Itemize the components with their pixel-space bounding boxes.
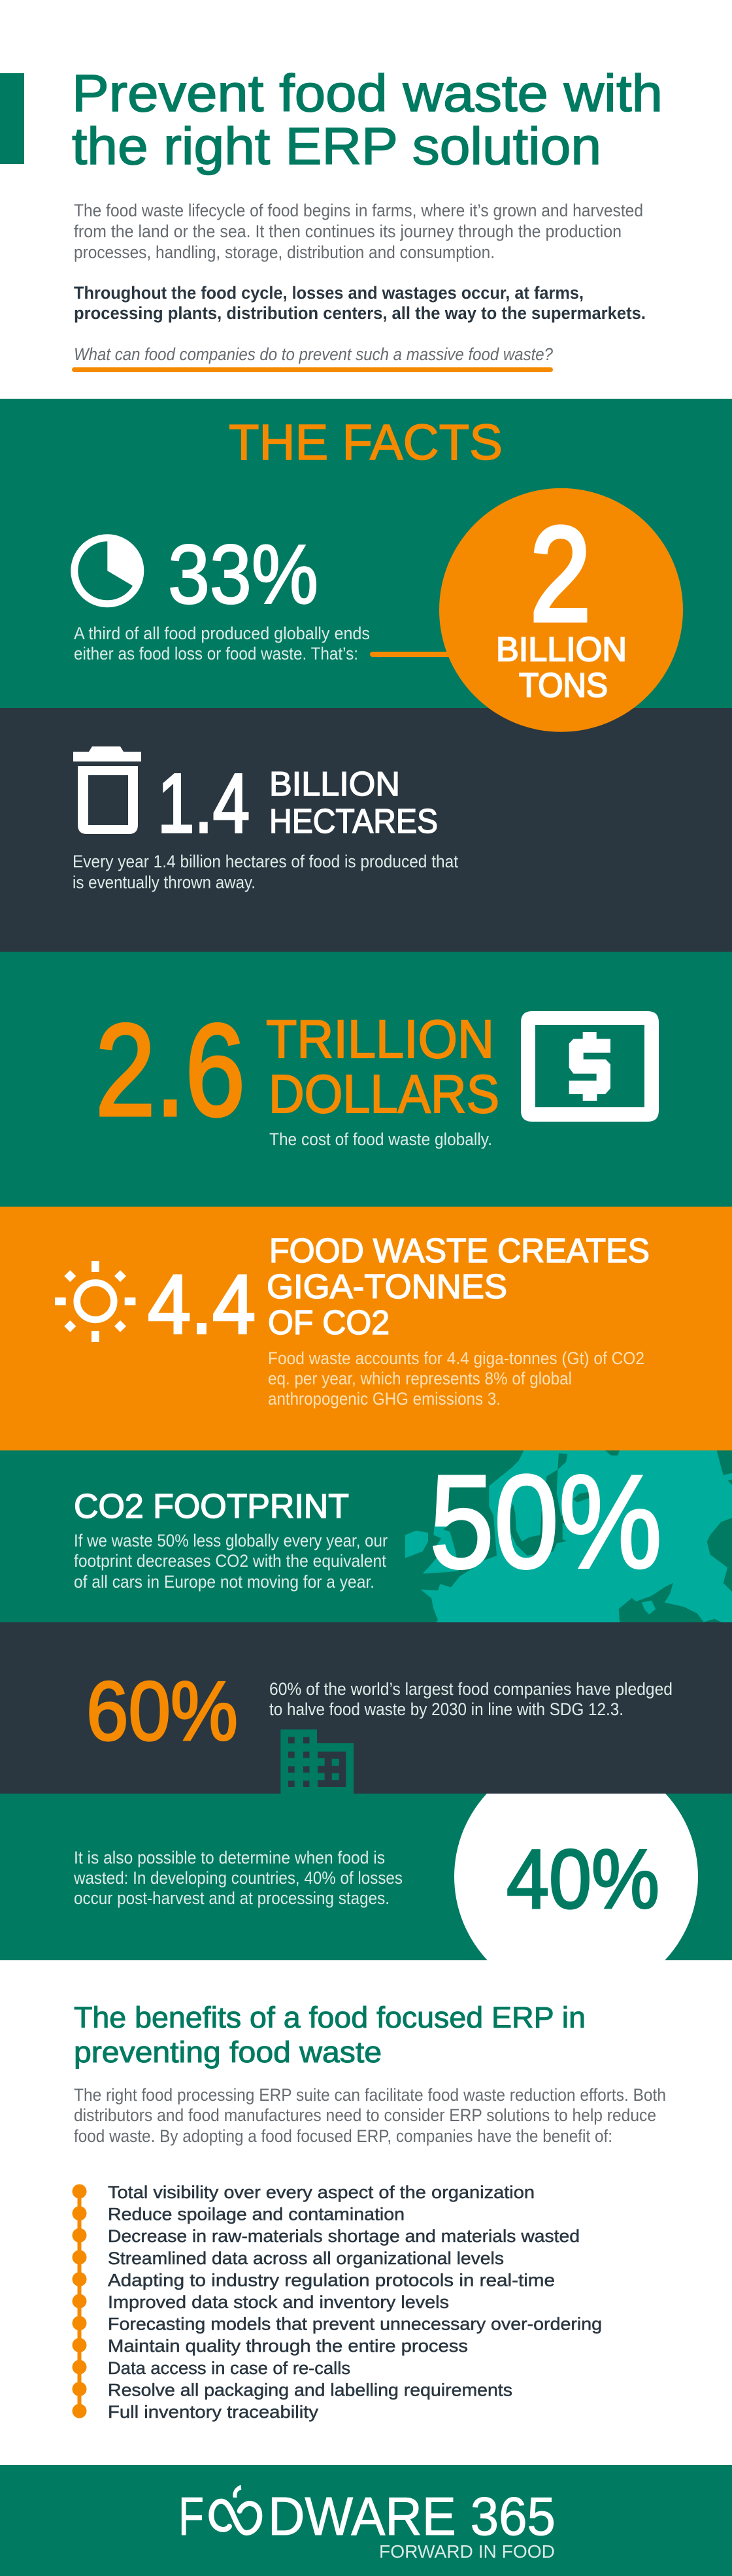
text: cost of food waste: The cost of food waste globally.: [269, 1129, 492, 1149]
bold statement: processing plants, distribution centers, all the way to the supermarkets.: [74, 303, 646, 323]
title: the right ERP solution: [72, 117, 601, 175]
icon: pie chart: [75, 538, 141, 604]
text: food waste accounts: Food waste accounts for 4.4 giga-tonnes (Gt) of CO2: [268, 1348, 644, 1368]
heading: benefits: The benefits of a food focused ERP in: [74, 2001, 586, 2034]
text: every year: [73, 852, 458, 892]
label: billion hectares: HECTARES: [269, 803, 438, 841]
benefits list: Total visibility over every aspect of the organization: [108, 2183, 535, 2202]
benefits list: Data access in case of re-calls: [108, 2358, 350, 2378]
text: waste 50 percent less: footprint decreases CO2 with the equivalent: [74, 1551, 386, 1571]
stat: 50 percent: 50%: [429, 1448, 662, 1596]
text: every year: Every year 1.4 billion hectares of food is produced that: [73, 852, 458, 871]
benefits list: Adapting to industry regulation protocols in real-time: [108, 2270, 555, 2290]
icon: apple infinity: [211, 2485, 259, 2533]
heading: food waste creates: [267, 1232, 650, 1342]
callout: 2 billion tons circle: [439, 488, 683, 732]
heading: benefits: preventing food waste: [74, 2035, 382, 2069]
text: right food processing ERP: [74, 2085, 666, 2146]
icon: dollar bill: [521, 1011, 659, 1122]
benefits list: Resolve all packaging and labelling requirements: [108, 2380, 512, 2400]
text: a third of food: A third of all food produced globally ends: [74, 624, 370, 643]
panel: 4.4 giga-tonnes of CO2: [0, 1207, 732, 1450]
text: pledged: 60% of the world’s largest food companies have pledged: [269, 1679, 673, 1699]
text: waste 50 percent less: [74, 1531, 388, 1592]
benefits list: Full inventory traceability: [108, 2402, 319, 2422]
bullet timeline: [72, 2184, 86, 2418]
benefits list: [108, 2183, 602, 2422]
benefits list: Streamlined data across all organizational levels: [108, 2249, 504, 2268]
intro paragraph: [74, 201, 643, 262]
intro paragraph: processes, handling, storage, distribution and consumption.: [74, 243, 495, 262]
text: determine when food is wasted: occur post-harvest and at processing stages.: [74, 1888, 390, 1908]
stat: 60 percent: 60%: [86, 1665, 238, 1758]
icon: trash can: [73, 746, 141, 834]
heading: food waste creates: OF CO2: [268, 1304, 390, 1342]
panel: footer: [0, 2465, 732, 2576]
orange underline: [72, 367, 553, 372]
text: food waste accounts: eq. per year, which represents 8% of global: [268, 1369, 572, 1388]
intro paragraph: from the land or the sea. It then continues its journey through the production: [74, 222, 622, 241]
bold statement: Throughout the food cycle, losses and wastages occur, at farms,: [74, 283, 584, 303]
label: trillion dollars: [266, 1009, 499, 1124]
text: determine when food is wasted: [73, 1848, 403, 1908]
callout: 40 percent circle: 40%: [507, 1833, 659, 1926]
text: waste 50 percent less: of all cars in Europe not moving for a year.: [74, 1572, 374, 1592]
title: Prevent food waste with: [72, 64, 663, 122]
stat: 2.6: 2.6: [95, 997, 245, 1143]
bold statement: [74, 283, 646, 323]
benefits list: Forecasting models that prevent unnecessary over-ordering: [108, 2315, 602, 2334]
logo: Foodware 365: F: [178, 2486, 204, 2547]
benefits list: Improved data stock and inventory levels: [108, 2292, 449, 2312]
heading: the facts: THE FACTS: [229, 414, 503, 471]
benefits list: Maintain quality through the entire process: [108, 2336, 468, 2356]
icon: building: [280, 1730, 354, 1794]
text: right food processing ERP: food waste. By adopting a food focused ERP, companies have the benefit of:: [74, 2126, 612, 2146]
panel: intro header: [0, 64, 663, 372]
stat: 1.4: 1.4: [158, 757, 250, 850]
benefits list: Decrease in raw-materials shortage and materials wasted: [108, 2226, 580, 2246]
text: a third of food: either as food loss or food waste. That’s:: [74, 644, 358, 663]
heading: benefits: [74, 2001, 586, 2069]
text: right food processing ERP: distributors and food manufactures need to consider ERP solutions to help reduce: [74, 2105, 656, 2125]
text: every year: is eventually thrown away.: [73, 873, 256, 892]
panel: the facts, 33 percent: [0, 399, 732, 708]
callout: 2 billion tons circle: 2: [530, 499, 591, 649]
callout: 2 billion tons circle: BILLION: [496, 631, 627, 669]
text: food waste accounts: anthropogenic GHG emissions 3.: [268, 1389, 501, 1409]
heading: CO2 footprint: CO2 FOOTPRINT: [74, 1488, 349, 1526]
connector line: [370, 652, 455, 657]
panel: benefits: [72, 2001, 666, 2422]
panel: 1.4 billion hectares: [0, 708, 732, 952]
panel: CO2 footprint: [0, 1448, 732, 1624]
text: waste 50 percent less: If we waste 50% less globally every year, our: [74, 1531, 388, 1550]
text: a third of food: [74, 624, 370, 663]
logo: Foodware 365: DWARE 365: [268, 2486, 556, 2547]
text: right food processing ERP: The right food processing ERP suite can facilitate food waste reduction efforts. Both: [74, 2085, 666, 2105]
heading: food waste creates: GIGA-TONNES: [267, 1268, 507, 1306]
accent bar: [0, 73, 24, 164]
title: [72, 64, 663, 175]
stat: 33 percent: 33%: [168, 528, 318, 622]
text: determine when food is wasted: wasted: In developing countries, 40% of losses: [73, 1868, 403, 1888]
label: trillion dollars: DOLLARS: [269, 1063, 499, 1124]
icon: sun: [55, 1261, 135, 1342]
text: pledged: to halve food waste by 2030 in line with SDG 12.3.: [269, 1699, 624, 1719]
benefits list: Reduce spoilage and contamination: [108, 2205, 405, 2224]
callout: 2 billion tons circle: TONS: [519, 667, 608, 705]
panel: 60 percent pledge: [0, 1622, 732, 1794]
callout: 40 percent circle: [454, 1794, 698, 1960]
logo: Foodware 365: FORWARD IN FOOD: [379, 2541, 555, 2562]
panel: 2.6 trillion dollars: [0, 952, 732, 1207]
intro paragraph: The food waste lifecycle of food begins in farms, where it’s grown and harvested: [74, 201, 643, 220]
text: food waste accounts: [268, 1348, 644, 1409]
text: determine when food is wasted: It is also possible to determine when food is: [74, 1848, 385, 1867]
panel: 40 percent losses: [0, 1794, 732, 1960]
label: billion hectares: BILLION: [269, 765, 400, 803]
map: europe: [405, 1448, 732, 1624]
logo: Foodware 365: [178, 2485, 556, 2562]
label: billion hectares: [269, 765, 438, 841]
heading: food waste creates: FOOD WASTE CREATES: [269, 1232, 650, 1270]
italic question: What can food companies do to prevent such a massive food waste?: [74, 344, 553, 364]
text: pledged: [269, 1679, 673, 1719]
label: trillion dollars: TRILLION: [266, 1009, 494, 1069]
stat: 4.4: 4.4: [148, 1258, 256, 1352]
